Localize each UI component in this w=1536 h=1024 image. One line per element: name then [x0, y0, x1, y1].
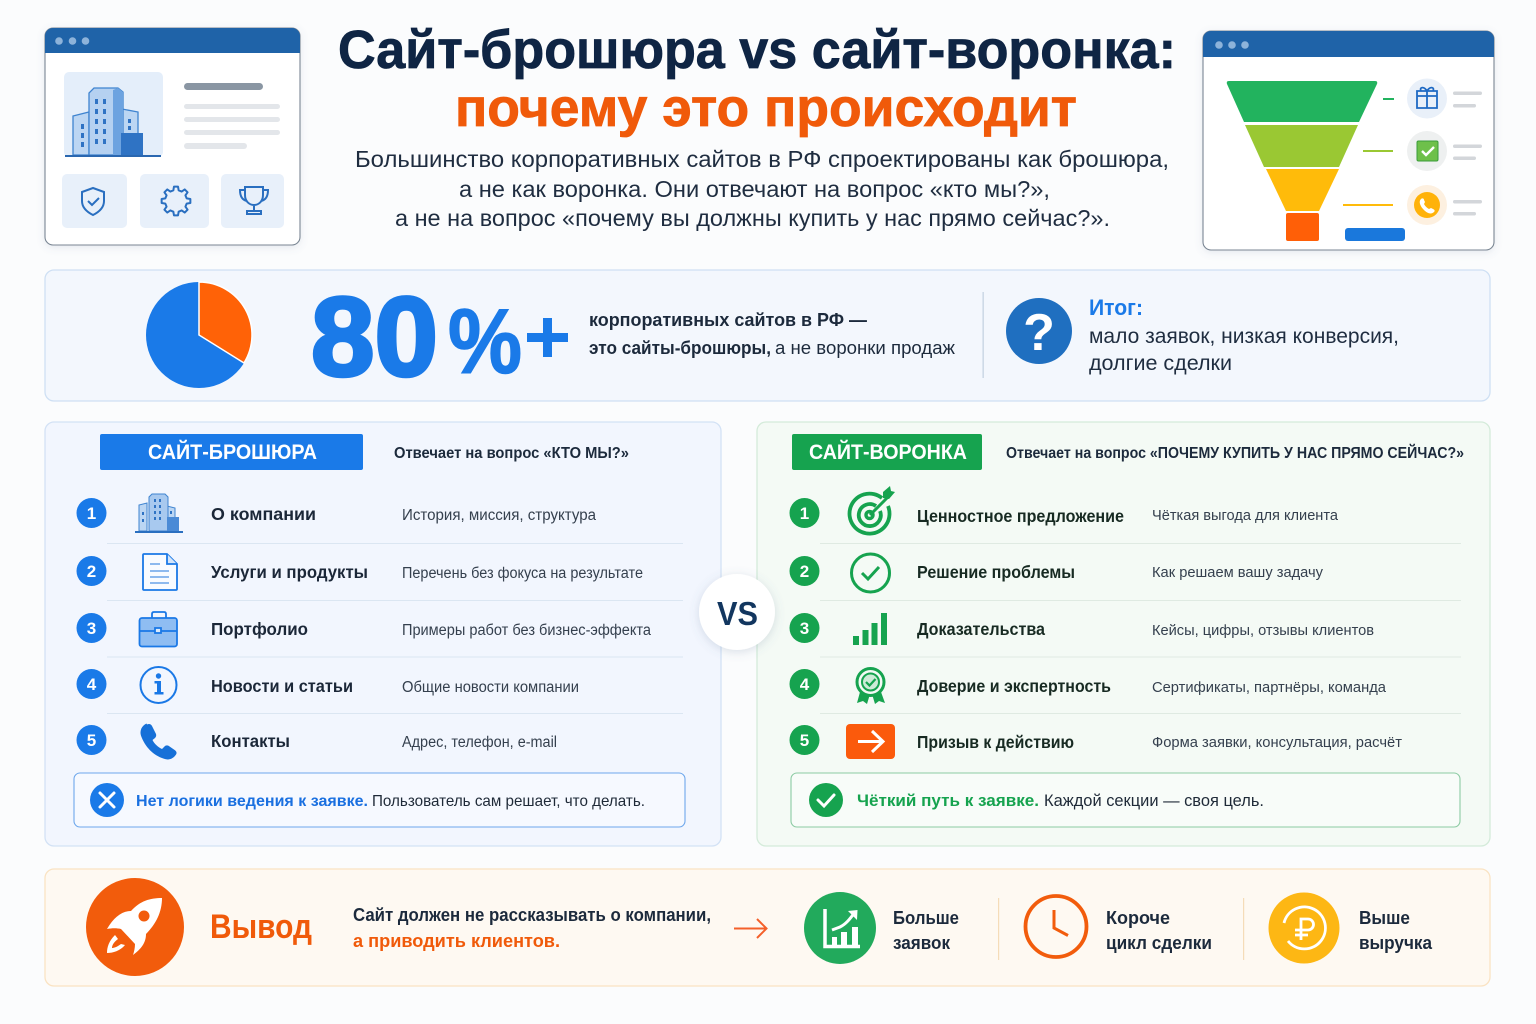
tag: funnel site: САЙТ-ВОРОНКА: [809, 440, 967, 464]
brochure rows descriptions: [402, 507, 651, 751]
brochure rows text: [211, 504, 368, 751]
brochure rows text: Контакты: [211, 731, 290, 751]
result text: мало заявок, низкая конверсия,: [1089, 325, 1399, 348]
subtitle: а не на вопрос «почему вы должны купить у нас прямо сейчас?».: [395, 205, 1110, 231]
arrow: [734, 919, 766, 938]
title: Сайт-брошюра vs сайт-воронка:: [338, 20, 1176, 80]
funnel rows descriptions: Кейсы, цифры, отзывы клиентов: [1152, 622, 1374, 639]
brochure rows text: Портфолио: [211, 619, 308, 639]
funnel rows descriptions: [1152, 507, 1402, 751]
subtitle: [355, 146, 1169, 231]
number badges: 4: [800, 675, 810, 694]
number badges: 3: [800, 619, 809, 638]
brochure rows text: Новости и статьи: [211, 676, 353, 696]
number badges: 2: [87, 562, 96, 581]
benefit: shorter cycle: Короче: [1106, 907, 1170, 928]
result text: Итог:: [1089, 295, 1143, 320]
result text: долгие сделки: [1089, 352, 1232, 375]
panel: funnel site: [757, 422, 1490, 846]
funnel rows descriptions: Сертификаты, партнёры, команда: [1152, 679, 1387, 696]
number badges: [790, 498, 820, 755]
title: [338, 20, 1176, 138]
benefit: shorter cycle: [1106, 907, 1212, 953]
icon: growth chart: [804, 892, 876, 964]
tag: brochure site: [100, 434, 363, 470]
callout: clear path: [791, 773, 1460, 827]
icon: question mark: [1006, 298, 1072, 364]
callout: no logic: Пользователь сам решает, что делать.: [372, 793, 645, 810]
icon: bars: [853, 613, 887, 645]
icon: building: [135, 494, 183, 533]
benefit: higher revenue: выручка: [1359, 932, 1433, 953]
big number: 80: [311, 274, 438, 400]
icon: ruble coin: [1268, 892, 1340, 964]
icon: clock: [1026, 896, 1086, 957]
funnel rows text: Призыв к действию: [917, 732, 1074, 752]
subtitle: а не как воронка. Они отвечают на вопрос «кто мы?»,: [459, 176, 1050, 202]
tag: funnel site: [792, 434, 982, 470]
panel: 80% statistic: [45, 270, 1490, 401]
brochure rows descriptions: Примеры работ без бизнес-эффекта: [402, 622, 651, 639]
heading: question: Отвечает на вопрос «ПОЧЕМУ КУПИТЬ У НАС ПРЯМО СЕЙЧАС?»: [1006, 443, 1464, 462]
icon: target: [850, 486, 895, 534]
icon: question mark: ?: [1023, 304, 1055, 362]
benefit: more leads: заявок: [893, 932, 951, 953]
number badges: 3: [87, 619, 96, 638]
number badges: 1: [800, 504, 809, 523]
icon: briefcase: [140, 612, 177, 646]
panel: brochure site: [45, 422, 721, 846]
illustration: brochure site window: [45, 28, 300, 245]
heading: question: Отвечает на вопрос «КТО МЫ?»: [394, 445, 629, 462]
conclusion text: Сайт должен не рассказывать о компании,: [353, 905, 711, 925]
number badges: 4: [87, 675, 97, 694]
number badges: 1: [87, 504, 96, 523]
callout: no logic: [74, 773, 685, 827]
big number: [311, 274, 568, 400]
big number: %: [448, 291, 522, 393]
icon: medal: [857, 668, 885, 704]
callout: clear path: Чёткий путь к заявке.: [857, 792, 1039, 810]
icon: orange arrow button: [846, 724, 895, 759]
icon: document: [143, 554, 177, 590]
subtitle: Большинство корпоративных сайтов в РФ спроектированы как брошюра,: [355, 146, 1169, 172]
brochure rows descriptions: Общие новости компании: [402, 679, 579, 696]
conclusion text: [353, 905, 711, 951]
benefit: higher revenue: Выше: [1359, 907, 1410, 928]
funnel rows text: [917, 506, 1124, 752]
funnel rows text: Доверие и экспертность: [917, 676, 1111, 696]
brochure rows descriptions: История, миссия, структура: [402, 507, 596, 524]
VS badge: [699, 574, 775, 650]
icon: check circle: [852, 554, 890, 592]
icon: rocket: [86, 878, 184, 976]
pie chart: [146, 282, 252, 388]
funnel rows text: Доказательства: [917, 619, 1045, 639]
tag: brochure site: САЙТ-БРОШЮРА: [148, 440, 317, 464]
funnel rows text: Ценностное предложение: [917, 506, 1124, 526]
benefit: more leads: Больше: [893, 907, 959, 928]
number badges: [76, 498, 106, 755]
icon: phone: [141, 724, 177, 759]
benefit: more leads: [893, 907, 959, 953]
stat description: [589, 309, 956, 358]
illustration: funnel site window: [1203, 31, 1494, 250]
result text: [1089, 295, 1399, 375]
heading: conclusion: Вывод: [210, 908, 312, 946]
conclusion text: а приводить клиентов.: [353, 931, 560, 951]
stat description: корпоративных сайтов в РФ —: [589, 309, 867, 330]
benefit: higher revenue: [1359, 907, 1433, 953]
number badges: 5: [800, 731, 809, 750]
benefit: shorter cycle: цикл сделки: [1106, 932, 1212, 953]
panel: conclusion: [45, 869, 1490, 986]
brochure rows text: О компании: [211, 504, 316, 524]
funnel rows descriptions: Чёткая выгода для клиента: [1152, 507, 1339, 524]
number badges: 5: [87, 731, 96, 750]
callout: no logic: Нет логики ведения к заявке.: [136, 793, 368, 810]
stat description: это сайты-брошюры,: [589, 337, 771, 358]
icon: info: [140, 667, 176, 703]
brochure rows descriptions: Адрес, телефон, e-mail: [402, 734, 557, 751]
funnel rows descriptions: Форма заявки, консультация, расчёт: [1152, 734, 1402, 751]
title: почему это происходит: [455, 78, 1077, 138]
brochure rows text: Услуги и продукты: [211, 562, 368, 582]
number badges: 2: [800, 562, 809, 581]
funnel rows text: Решение проблемы: [917, 562, 1075, 582]
funnel rows descriptions: Как решаем вашу задачу: [1152, 564, 1323, 581]
stat description: а не воронки продаж: [775, 337, 956, 358]
callout: clear path: Каждой секции — своя цель.: [1044, 792, 1264, 810]
VS badge: VS: [717, 595, 758, 632]
brochure rows descriptions: Перечень без фокуса на результате: [402, 565, 643, 582]
